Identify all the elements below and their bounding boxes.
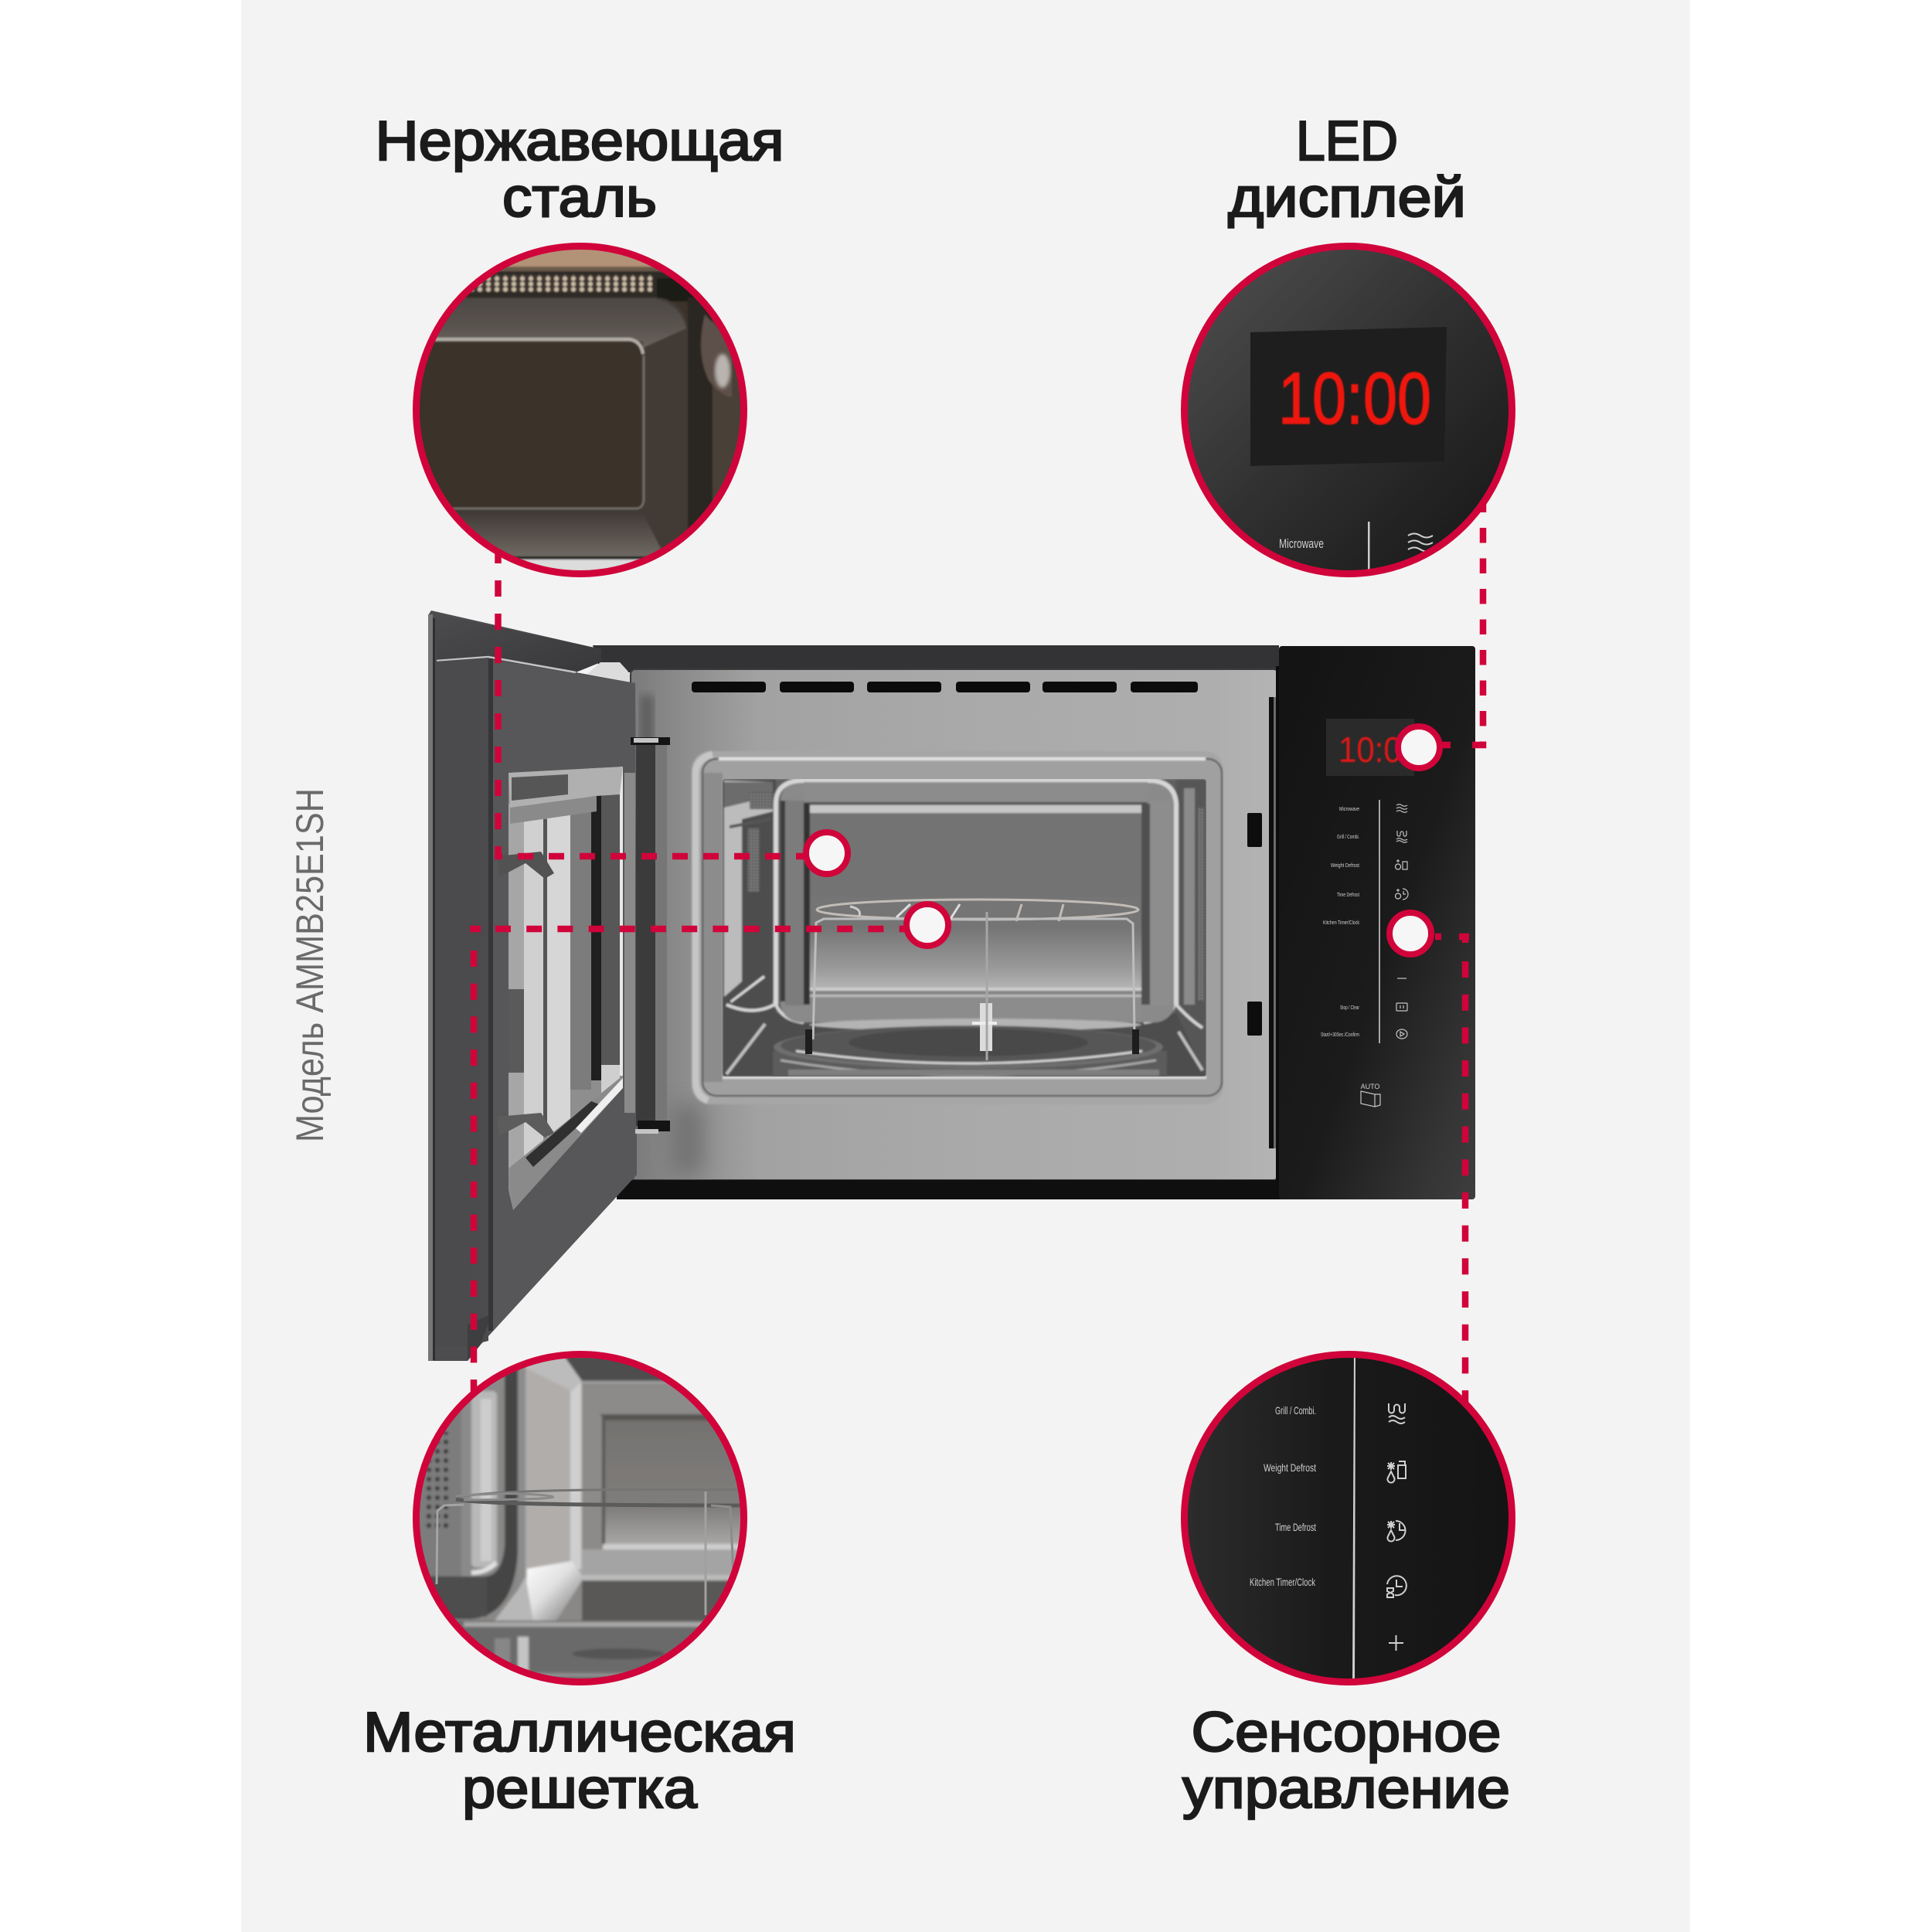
touch labels bbox=[1250, 1404, 1316, 1588]
title: LED display: дисплей bbox=[1228, 167, 1466, 229]
waves icon bbox=[1408, 533, 1433, 552]
title: metal rack: решетка bbox=[462, 1758, 698, 1820]
metal rack bbox=[805, 900, 1139, 1060]
title: LED display: LED bbox=[1296, 111, 1398, 172]
leader line: stainless steel bbox=[495, 547, 808, 859]
detail circle: steel interior bbox=[413, 243, 747, 577]
panel labels bbox=[1321, 807, 1359, 1038]
display window bbox=[1250, 327, 1447, 466]
auto button: AUTO bbox=[1361, 1083, 1379, 1090]
marker dots bbox=[806, 726, 1440, 954]
leader line: metal rack bbox=[470, 929, 908, 1399]
open door bbox=[428, 611, 637, 1361]
right side strip bbox=[1269, 666, 1282, 1182]
back wall bbox=[781, 781, 1175, 1022]
right wall bbox=[1176, 779, 1206, 1077]
LED readout bbox=[1326, 719, 1420, 776]
touch labels: Time Defrost bbox=[1275, 1521, 1316, 1533]
panel labels: Time Defrost bbox=[1337, 893, 1359, 898]
title: touch control: Сенсорное bbox=[1192, 1702, 1501, 1764]
glass turntable bbox=[773, 1003, 1167, 1077]
clock readout: 10:00 bbox=[1278, 358, 1431, 440]
leader line: touch control bbox=[1435, 937, 1469, 1403]
panel labels: Microwave bbox=[1339, 807, 1359, 812]
touch icons bbox=[1387, 1403, 1406, 1651]
leader line: LED display bbox=[1442, 498, 1486, 748]
control panel bbox=[1279, 646, 1475, 1199]
oven cavity frame bbox=[692, 751, 1223, 1104]
panel divider bbox=[1379, 800, 1380, 1043]
stainless front bbox=[631, 669, 1278, 1180]
central light panel bbox=[241, 0, 1690, 1932]
panel labels: Kitchen Timer/Clock bbox=[1323, 920, 1359, 926]
bottom trim bbox=[617, 1180, 1281, 1199]
touch labels: Weight Defrost bbox=[1264, 1461, 1316, 1474]
title: stainless steel: сталь bbox=[502, 167, 657, 229]
touch labels: Kitchen Timer/Clock bbox=[1250, 1576, 1316, 1588]
title: LED display bbox=[1228, 111, 1466, 229]
title: touch control bbox=[1182, 1702, 1510, 1820]
model label: Модель AMMB25E1SH bbox=[288, 788, 332, 1142]
side latch slots bbox=[1247, 813, 1262, 1036]
divider bbox=[1352, 1349, 1355, 1689]
panel labels: Weight Defrost bbox=[1331, 863, 1359, 869]
title: metal rack bbox=[363, 1702, 796, 1820]
title: metal rack: Металлическая bbox=[363, 1702, 796, 1764]
panel labels: Grill / Combi. bbox=[1337, 835, 1359, 840]
left wall bbox=[723, 779, 776, 1077]
microwave bbox=[428, 611, 1475, 1361]
detail circle: metal rack bbox=[410, 1349, 757, 1690]
rack wire bbox=[437, 1489, 750, 1615]
LED readout: 10:00 bbox=[1338, 730, 1420, 770]
door latches bbox=[497, 852, 554, 1138]
title: stainless steel: Нержавеющая bbox=[376, 111, 784, 172]
light notch by door bbox=[587, 662, 635, 683]
divider bbox=[1368, 522, 1369, 580]
dark smudges on steel bbox=[640, 696, 703, 1175]
title: stainless steel bbox=[376, 111, 784, 229]
oven cavity bbox=[723, 779, 1206, 1077]
microwave label: Microwave bbox=[1279, 536, 1324, 551]
floor bbox=[723, 1012, 1206, 1077]
title: touch control: управление bbox=[1182, 1758, 1510, 1820]
detail circle: touch control bbox=[1179, 1349, 1519, 1689]
door hinge strip bbox=[624, 737, 670, 1134]
auto button bbox=[1361, 1083, 1380, 1107]
vents bbox=[692, 682, 1198, 692]
door window bbox=[506, 765, 626, 1213]
touch labels: Grill / Combi. bbox=[1275, 1404, 1316, 1417]
detail circle: LED display bbox=[1179, 240, 1519, 580]
top trim bbox=[593, 645, 1279, 672]
cavity wall shape bbox=[641, 297, 687, 548]
panel labels: Start/+30Sec./Confirm bbox=[1321, 1032, 1359, 1038]
panel icons bbox=[1396, 804, 1408, 1039]
panel labels: Stop / Clear bbox=[1340, 1005, 1359, 1011]
